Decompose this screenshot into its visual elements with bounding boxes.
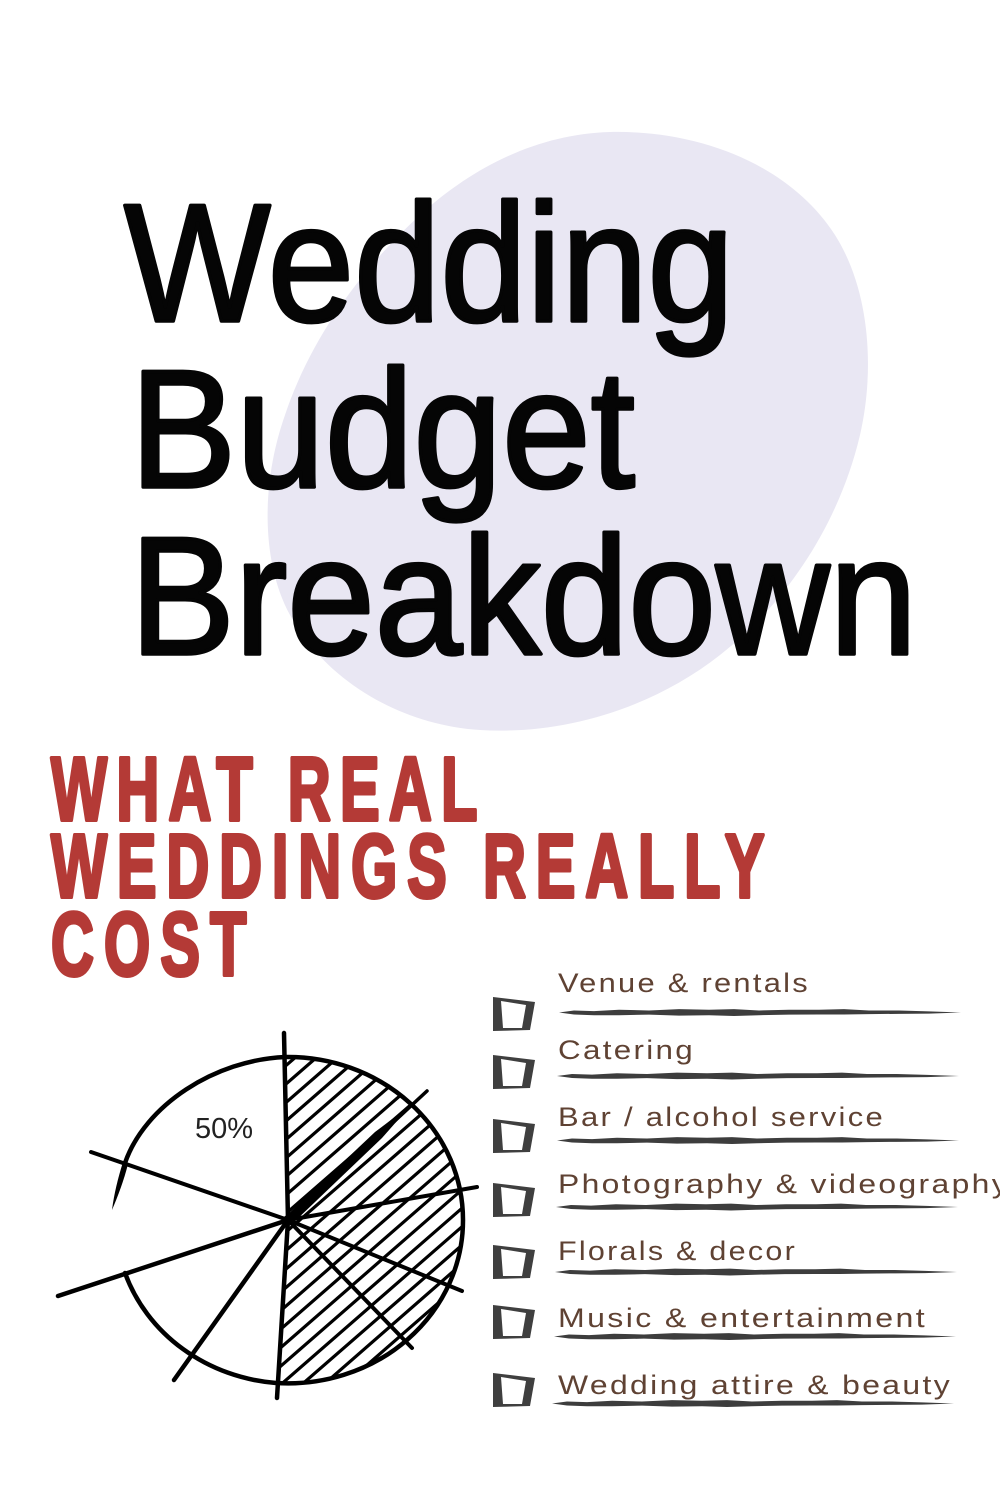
background blob [268, 132, 868, 731]
title: Wedding [124, 169, 734, 357]
subtitle: WEDDINGS REALLY [51, 817, 764, 917]
item: bar [493, 1102, 959, 1153]
item: music: Music & entertainment [558, 1303, 927, 1333]
item: catering [493, 1035, 959, 1089]
subtitle: COST [51, 895, 246, 995]
pie chart [56, 1030, 479, 1400]
title: Breakdown [130, 502, 917, 690]
item: venue [493, 968, 961, 1031]
item: music [493, 1303, 956, 1340]
pie label: 50% [195, 1113, 253, 1145]
item: photography [493, 1169, 1000, 1217]
title [124, 169, 917, 690]
spokes [58, 1033, 477, 1398]
title: Budget [130, 335, 635, 523]
subtitle [51, 740, 764, 995]
item: photography: Photography & videography [558, 1169, 1000, 1199]
item: bar: Bar / alcohol service [558, 1102, 885, 1132]
checklist [493, 968, 1000, 1407]
item: attire [493, 1370, 954, 1407]
tapered arc end [112, 1162, 128, 1210]
hatched segments [281, 1059, 461, 1382]
item: venue: Venue & rentals [558, 968, 810, 998]
item: florals [493, 1236, 957, 1279]
item: florals: Florals & decor [558, 1236, 797, 1266]
pie outline arcs [125, 1057, 463, 1383]
subtitle: WHAT REAL [51, 740, 477, 840]
item: catering: Catering [558, 1035, 695, 1065]
item: attire: Wedding attire & beauty [558, 1370, 952, 1400]
